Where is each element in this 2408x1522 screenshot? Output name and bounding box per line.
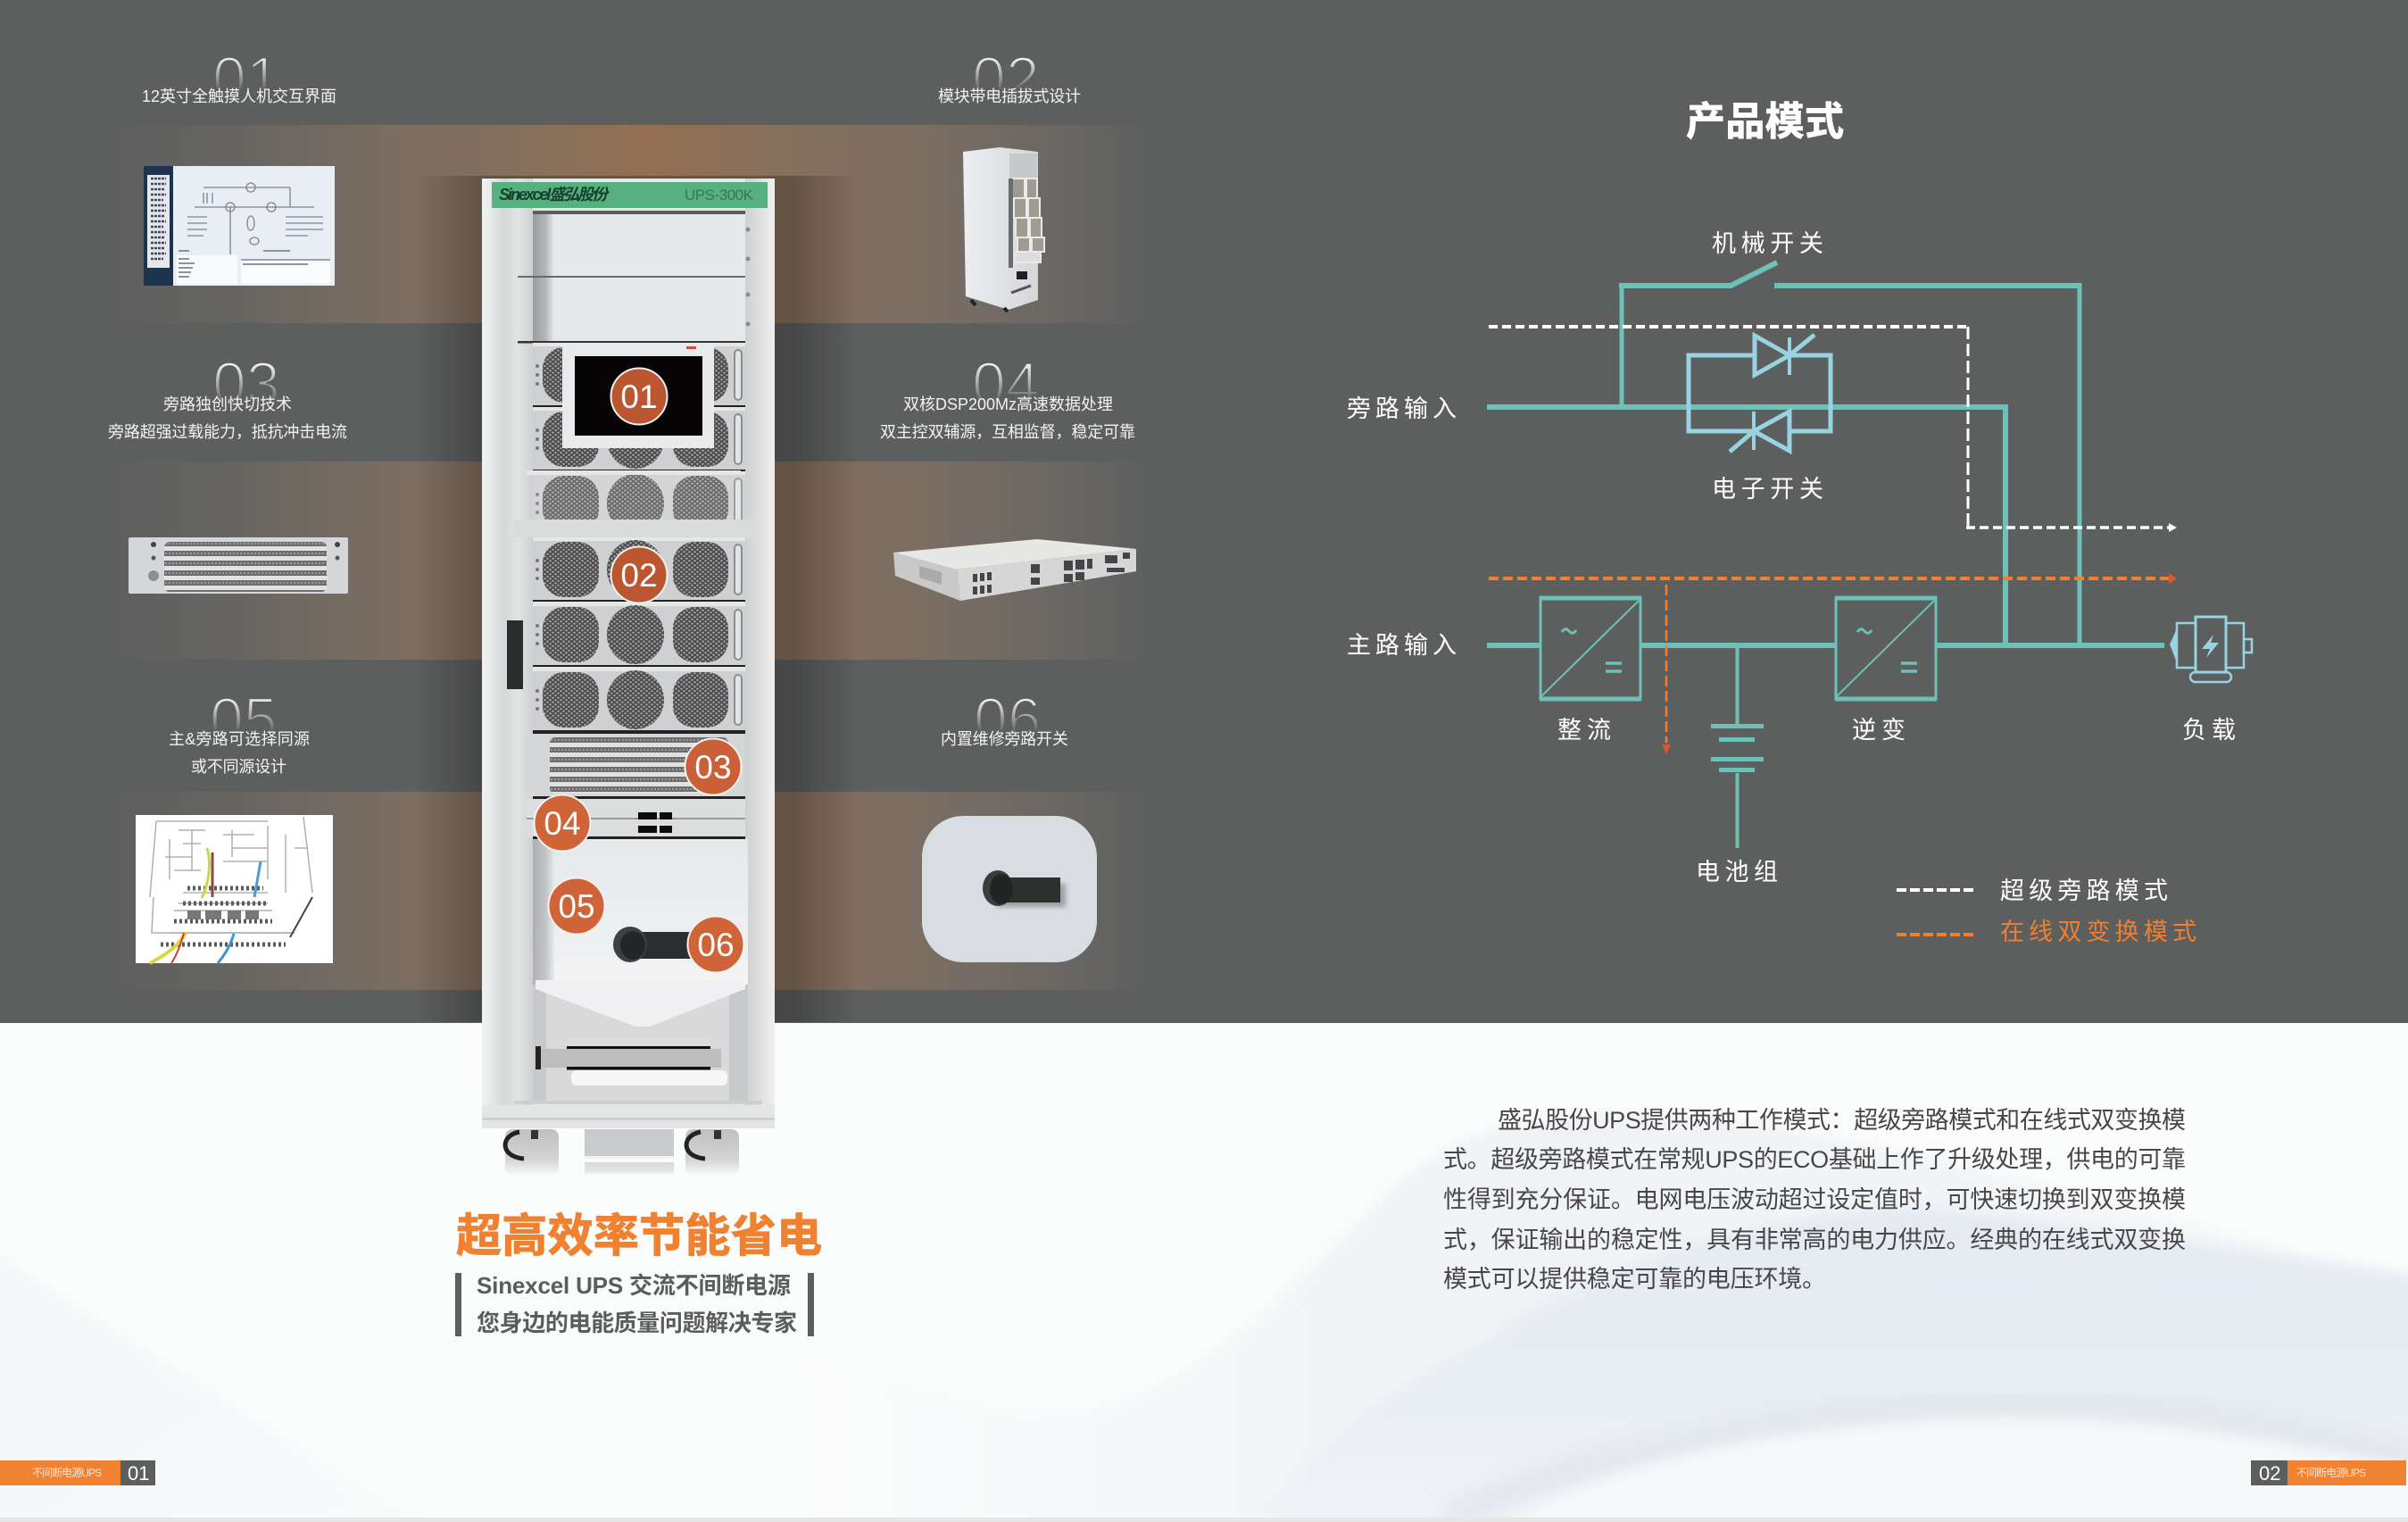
- footer page tag 02: 不间断电源UPS: [2296, 1466, 2366, 1479]
- load motor icon: [2170, 617, 2252, 682]
- footer page tag 01: 01: [128, 1462, 149, 1485]
- description paragraph: 模式可以提供稳定可靠的电压环境。: [1443, 1266, 1826, 1293]
- battery feed dashed arrow: [1662, 585, 1671, 754]
- feature 04: number, captions and controller: 04: [972, 350, 1040, 418]
- feature 04: number, captions and controller: 双主控双辅源，互相监督，稳定可靠: [880, 423, 1135, 441]
- feature 02: number, caption and cabinet thumbnail: 02: [972, 45, 1040, 112]
- maintenance switch thumbnail: [922, 816, 1097, 962]
- feature 01: number, caption and screenshot: [142, 45, 336, 286]
- feature 04: number, captions and controller: 双核DSP200Mz高速数据处理: [903, 395, 1113, 413]
- rectifier block: [1540, 598, 1641, 699]
- description paragraph: 式，保证输出的稳定性，具有非常高的电力供应。经典的在线式双变换: [1443, 1227, 2186, 1253]
- rotary handle: [613, 927, 705, 962]
- cabinet base: [482, 1105, 775, 1128]
- feature 03: number, captions and bypass module: 03: [212, 350, 280, 418]
- dark header panel: [0, 0, 2408, 1023]
- green name plate: [492, 182, 768, 208]
- feature 06: number, caption and switch: [922, 686, 1097, 962]
- footer page tag 02: [2251, 1460, 2406, 1485]
- wiring diagram thumbnail: [136, 815, 333, 963]
- callout 02: 02: [620, 557, 658, 594]
- power modules: [513, 343, 754, 732]
- feature 04: number, captions and controller: [880, 350, 1136, 601]
- callout 05: 05: [558, 888, 595, 925]
- headline: 超高效率节能省电: [456, 1210, 822, 1261]
- callout 03: [685, 739, 741, 794]
- screenshot thumbnail: [144, 166, 335, 286]
- callout 04: 04: [544, 805, 581, 842]
- UPS cabinet illustration: [482, 179, 775, 1176]
- inverter block: [1835, 598, 1937, 699]
- feature bands: [116, 125, 1147, 1022]
- load label: 负载: [2182, 717, 2236, 744]
- cabinet thumbnail: [963, 147, 1044, 312]
- battery label: 电池组: [1696, 859, 1778, 886]
- green name plate: Sinexcel盛弘股份: [499, 186, 610, 204]
- description paragraph: [1443, 1107, 2186, 1293]
- footer page tag 01: [0, 1460, 155, 1485]
- main input wiring: [1487, 645, 2164, 848]
- super bypass arrowhead: [2169, 523, 2177, 532]
- electronic switch: [1689, 335, 1831, 452]
- feature 02: number, caption and cabinet thumbnail: 模块带电插拔式设计: [938, 87, 1081, 105]
- description paragraph: 性得到充分保证。电网电压波动超过设定值时，可快速切换到双变换模: [1443, 1186, 2186, 1213]
- battery symbol: [1711, 724, 1764, 772]
- bypass wiring: [1487, 262, 2080, 645]
- legend: online double conversion: 在线双变换模式: [2000, 919, 2196, 945]
- feature 06: number, caption and switch: 内置维修旁路开关: [941, 730, 1068, 748]
- feature 03: number, captions and bypass module: [108, 350, 348, 594]
- inverter label: 逆变: [1852, 717, 1906, 744]
- feature 03: number, captions and bypass module: 旁路独创快切技术: [163, 395, 292, 413]
- touch screen: [562, 344, 714, 448]
- feature 05: number, captions and wiring diagram: 或不同源设计: [191, 758, 286, 776]
- lower panel: [533, 839, 748, 986]
- callout 01: 01: [620, 378, 658, 415]
- wheels and plinth: [505, 1129, 739, 1176]
- callout 04: [534, 794, 591, 852]
- legend: [1897, 877, 2196, 945]
- description paragraph: 式。超级旁路模式在常规UPS的ECO基础上作了升级处理，供电的可靠: [1443, 1146, 2186, 1173]
- callout 01: [610, 368, 668, 425]
- main input label: 主路输入: [1347, 632, 1457, 659]
- feature 06: number, caption and switch: 06: [974, 686, 1042, 753]
- callout 06: [687, 916, 744, 973]
- super bypass dashed path: [1489, 327, 2170, 528]
- callout 03: 03: [694, 749, 732, 786]
- callout 06: 06: [697, 927, 735, 963]
- electronic switch label: 电子开关: [1712, 476, 1823, 503]
- bypass module: [527, 732, 745, 799]
- feature 03: number, captions and bypass module: 旁路超强过载能力，抵抗冲击电流: [108, 423, 347, 441]
- UPS mode circuit diagram: [1347, 230, 2252, 886]
- door latch: [507, 620, 523, 689]
- double conversion dashed path: [1489, 577, 2170, 580]
- bypass module thumbnail: [129, 537, 348, 594]
- footer page tag 02: 02: [2259, 1462, 2280, 1485]
- feature 01: number, caption and screenshot: 01: [212, 45, 280, 112]
- green name plate: UPS-300K: [685, 187, 754, 204]
- double conversion arrowhead: [2169, 573, 2177, 584]
- legend: super bypass: 超级旁路模式: [2000, 877, 2168, 904]
- rectifier label: 整流: [1557, 717, 1611, 744]
- numbered callouts: [534, 368, 744, 973]
- mechanical switch label: 机械开关: [1712, 230, 1823, 257]
- callout 02: [610, 546, 668, 603]
- feature 02: number, caption and cabinet thumbnail: [938, 45, 1081, 312]
- feature 01: number, caption and screenshot: 12英寸全触摸人机交互界面: [142, 87, 336, 105]
- footer page tag 01: 不间断电源UPS: [32, 1466, 102, 1479]
- subtitle with side bars: [455, 1272, 814, 1336]
- subtitle with side bars: 您身边的电能质量问题解决专家: [477, 1310, 797, 1336]
- controller thumbnail: [893, 539, 1136, 601]
- controller: [527, 799, 745, 839]
- lower reflection and battery shelves: [514, 980, 762, 1104]
- feature 05: number, captions and wiring diagram: 05: [210, 686, 278, 753]
- upper blank panel: [518, 211, 750, 343]
- description paragraph: 盛弘股份UPS提供两种工作模式：超级旁路模式和在线式双变换模: [1498, 1107, 2186, 1134]
- diagram title: 产品模式: [1686, 100, 1844, 144]
- callout 05: [548, 878, 605, 934]
- bypass input label: 旁路输入: [1347, 395, 1457, 422]
- feature 05: number, captions and wiring diagram: [136, 686, 333, 963]
- feature 05: number, captions and wiring diagram: 主&旁路可选择同源: [169, 730, 310, 748]
- subtitle with side bars: Sinexcel UPS 交流不间断电源: [477, 1272, 791, 1299]
